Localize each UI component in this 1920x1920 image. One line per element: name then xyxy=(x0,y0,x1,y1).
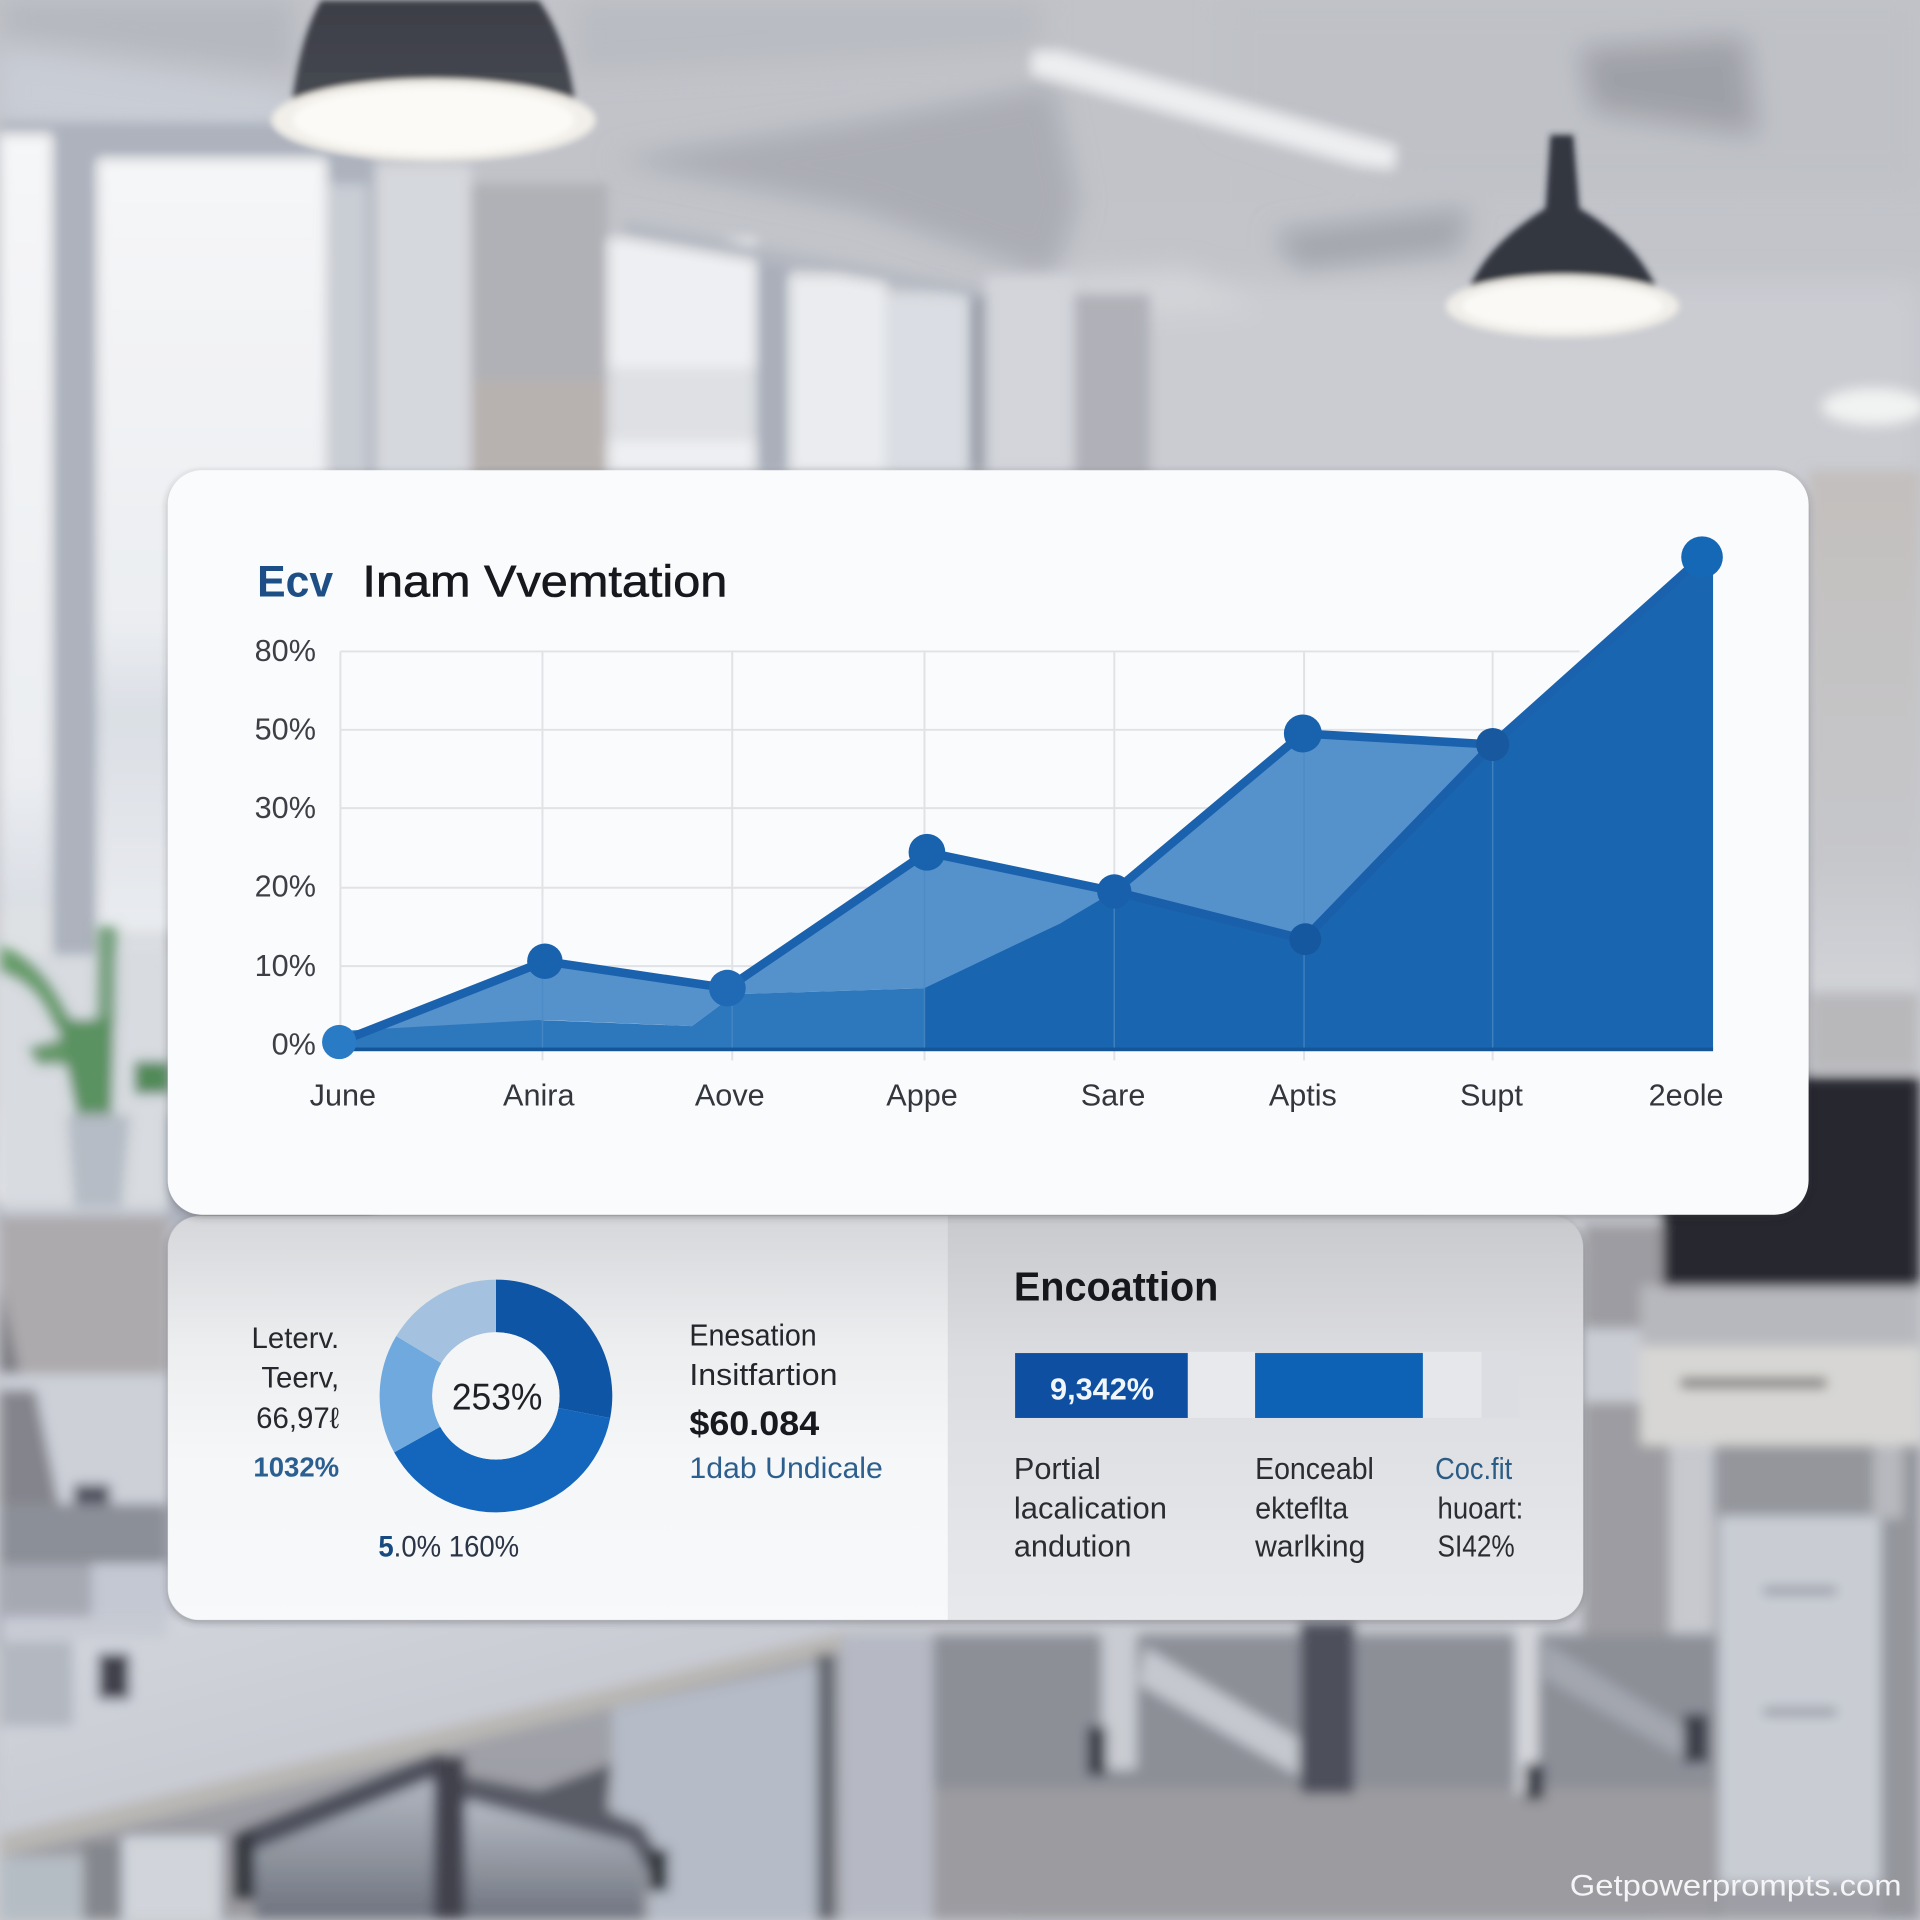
y axis labels: 30% xyxy=(255,791,316,825)
bar label column three: Coc.fit xyxy=(1435,1452,1513,1486)
area: dark blue series xyxy=(924,557,1713,1051)
left legend text xyxy=(252,1322,340,1483)
middle stats text: Insitfartion xyxy=(689,1358,838,1392)
bar label column three: huoart: xyxy=(1438,1491,1523,1525)
y axis labels: 10% xyxy=(255,949,316,983)
icon: pendant lamp left xyxy=(272,0,595,160)
bar label column one: Portial xyxy=(1014,1452,1101,1486)
y axis labels: 20% xyxy=(255,869,316,903)
bar label column three: SI42% xyxy=(1438,1529,1515,1563)
bar label column two: ekteflta xyxy=(1255,1491,1349,1525)
bar: medium blue xyxy=(1255,1353,1423,1418)
y axis labels: 0% xyxy=(272,1027,316,1061)
panel heading: encoattion: Encoattion xyxy=(1014,1263,1218,1309)
x axis labels xyxy=(310,1079,1724,1113)
y axis labels: 50% xyxy=(255,713,316,747)
area: light blue series xyxy=(339,733,1493,1042)
bar row xyxy=(1015,1351,1520,1418)
line: upper trend xyxy=(339,557,1702,1042)
bar: dark blue with value: 9,342% xyxy=(1050,1373,1154,1407)
bar: dark blue with value xyxy=(1015,1353,1188,1418)
x axis labels: 2eole xyxy=(1649,1079,1724,1113)
floor, desks and chairs xyxy=(0,992,1920,1920)
x axis labels: Aove xyxy=(695,1079,765,1113)
panel: lower summary card xyxy=(168,1216,1583,1620)
series grid overlay xyxy=(542,741,1493,1051)
bar label column one xyxy=(1014,1452,1167,1563)
bar label column two: warlking xyxy=(1254,1529,1365,1563)
watermark: Getpowerprompts.com xyxy=(1570,1870,1902,1903)
x axis labels: Supt xyxy=(1460,1079,1523,1113)
bar label column two: Eonceabl xyxy=(1255,1452,1374,1486)
middle stats text: $60.084 xyxy=(689,1405,819,1443)
x axis labels: Appe xyxy=(886,1079,958,1113)
icon: pendant lamp right xyxy=(1446,135,1679,337)
donut chart xyxy=(380,1280,612,1512)
area: medium blue series xyxy=(340,988,924,1051)
bar label column two xyxy=(1254,1452,1374,1563)
line: lower trend xyxy=(1114,744,1493,939)
baseline xyxy=(340,1048,1713,1051)
left legend text: Leterv. xyxy=(252,1322,339,1355)
left legend text: 66,97ℓ xyxy=(256,1402,340,1435)
x axis labels: Sare xyxy=(1081,1079,1145,1113)
left legend text: 1032% xyxy=(253,1452,339,1483)
chart title: Ecv xyxy=(257,557,334,606)
bar label column one: lacalication xyxy=(1014,1491,1167,1525)
bar label column one: andution xyxy=(1014,1529,1131,1563)
y axis labels xyxy=(255,634,316,1061)
area chart xyxy=(322,536,1723,1059)
left legend text: Teerv, xyxy=(261,1361,339,1394)
x axis labels: Aptis xyxy=(1269,1079,1337,1113)
y axis labels: 80% xyxy=(255,634,316,668)
plant and lower left room xyxy=(0,926,170,1644)
chart title: Inam Vvemtation xyxy=(362,557,727,606)
donut center value: 253% xyxy=(452,1376,542,1417)
x axis labels: June xyxy=(310,1079,376,1113)
x axis labels: Anira xyxy=(503,1079,575,1113)
middle stats text: Enesation xyxy=(689,1319,817,1353)
middle stats text xyxy=(689,1319,883,1485)
chart grid xyxy=(340,651,1580,1060)
bar label column three xyxy=(1435,1452,1523,1563)
data points xyxy=(322,536,1723,1059)
panel: main area chart card xyxy=(168,470,1809,1215)
donut caption: 5.0% 160% xyxy=(378,1530,519,1563)
middle stats text: 1dab Undicale xyxy=(689,1452,883,1485)
